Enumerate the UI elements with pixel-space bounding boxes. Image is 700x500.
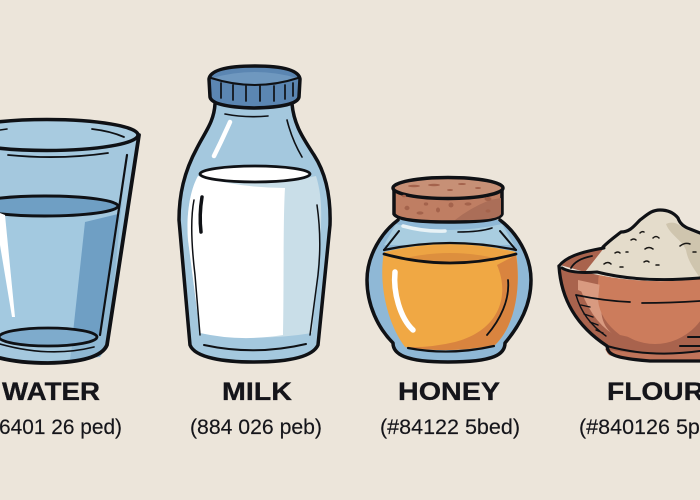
honey code: (#84122 5bed) (380, 416, 520, 439)
water code: 6401 26 ped) (0, 416, 122, 439)
infographic canvas (0, 64, 700, 439)
icon: honey jar (367, 178, 531, 362)
milk name: MILK (222, 378, 292, 406)
flour mound (583, 210, 700, 280)
bottle cap (209, 66, 300, 108)
icon: milk bottle (179, 66, 330, 362)
flour name: FLOUR (607, 378, 700, 406)
milk code: (884 026 peb) (190, 416, 322, 439)
bowl body (557, 246, 700, 363)
label: honey (380, 378, 520, 439)
icon: bowl of flour (559, 210, 700, 361)
water name: WATER (2, 378, 100, 406)
label: flour (579, 378, 700, 439)
honey name: HONEY (398, 378, 500, 406)
cork (393, 178, 503, 222)
label: milk (190, 378, 322, 439)
icon: glass of water (0, 120, 139, 363)
label: water (0, 378, 122, 439)
